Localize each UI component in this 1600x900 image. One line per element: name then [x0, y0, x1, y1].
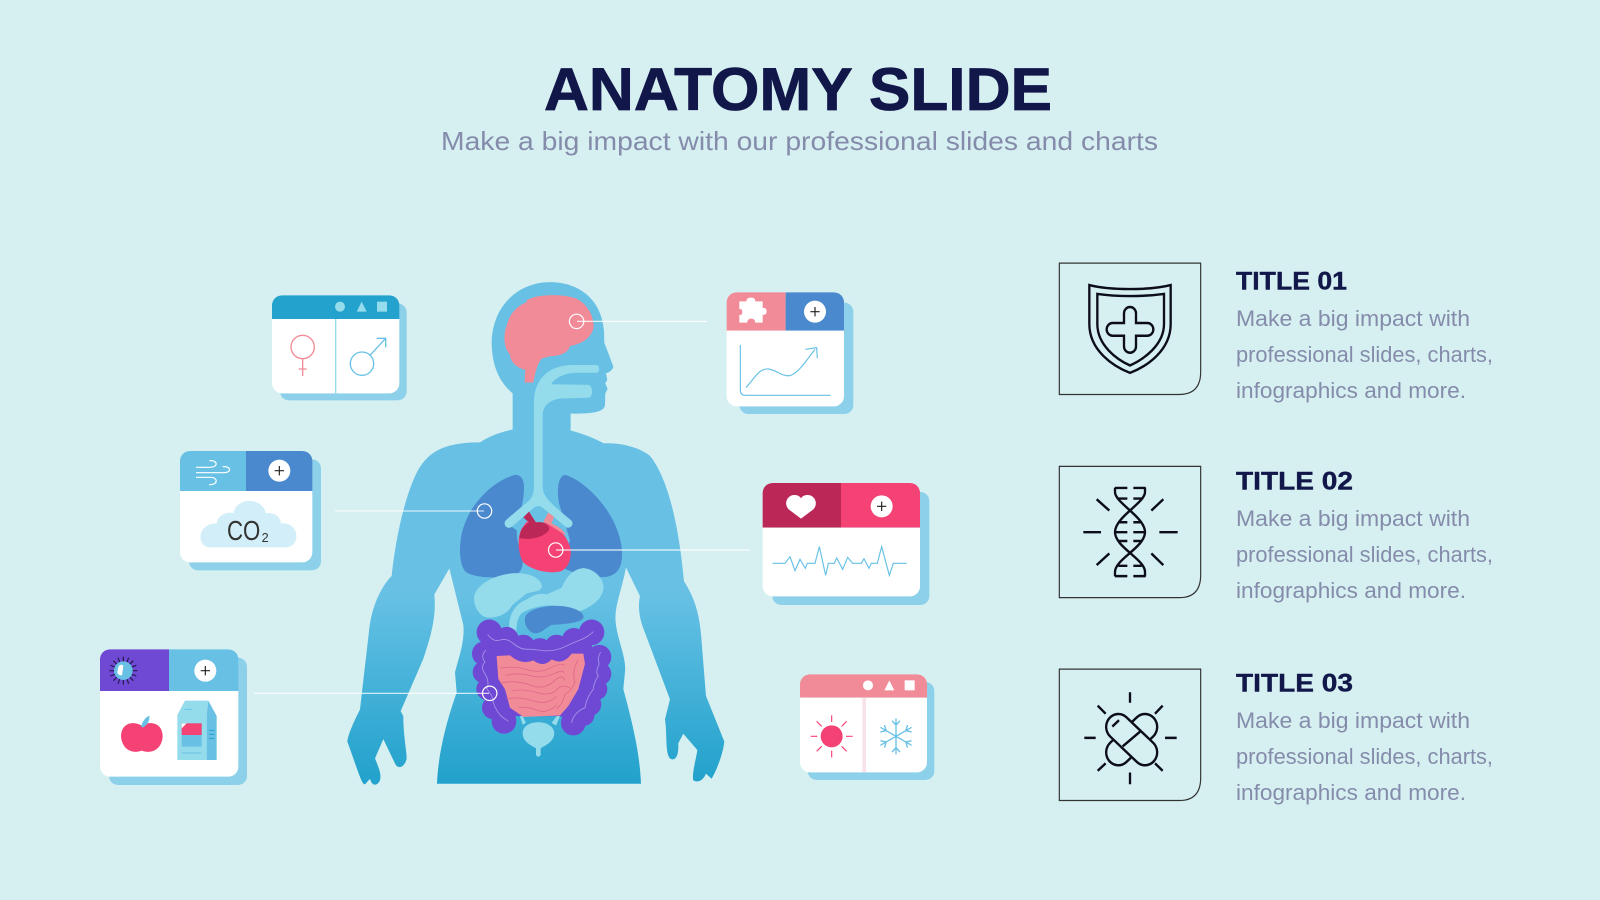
text block: title 03: infographics and more.	[1236, 780, 1466, 805]
icon: male symbol	[350, 338, 386, 375]
line chart	[740, 345, 831, 395]
icon: shield with cross	[1089, 285, 1171, 373]
icon: crossed bandage	[1084, 692, 1177, 784]
icon: female symbol	[291, 335, 314, 376]
lungs	[460, 475, 622, 577]
icon: wind	[196, 461, 230, 485]
leader line: intestine	[254, 686, 497, 700]
header shape icons	[863, 680, 915, 690]
text block: title 02: infographics and more.	[1236, 578, 1466, 603]
label: CO2: CO	[227, 515, 260, 546]
right column icons	[1059, 263, 1201, 801]
icon: plus button	[268, 460, 290, 482]
text block: title 02	[1236, 468, 1493, 603]
label: subscript 2: 2	[262, 531, 269, 545]
icon: plus button	[194, 660, 216, 682]
human body figure	[347, 282, 724, 785]
airway	[505, 365, 599, 528]
ECG trace	[773, 547, 907, 575]
subtitle: Make a big impact with our professional slides and charts	[441, 126, 1158, 156]
left cards	[100, 295, 407, 785]
leader line: heart	[548, 543, 750, 557]
icon: sun	[811, 715, 853, 757]
icon: snowflake	[878, 718, 914, 754]
brain	[504, 295, 594, 383]
panel: shield icon box	[1059, 263, 1201, 394]
icon: cloud	[200, 501, 296, 547]
icon: apple	[121, 716, 163, 752]
text block: title 02: professional slides, charts,	[1236, 542, 1493, 567]
text block: title 03: professional slides, charts,	[1236, 744, 1493, 769]
liver and stomach	[474, 568, 604, 635]
icon: puzzle piece	[739, 298, 767, 323]
icon: germ	[109, 657, 137, 685]
panel: bandage icon box	[1059, 669, 1201, 801]
icon: heart	[786, 495, 816, 519]
text block: title 02: Make a big impact with	[1236, 506, 1470, 531]
card: brain puzzle chart	[727, 292, 853, 414]
card: carbon dioxide	[180, 451, 321, 570]
card: nutrition	[100, 649, 247, 785]
icon: milk carton	[177, 701, 217, 760]
intestine fold lines	[482, 632, 601, 723]
pancreas	[525, 606, 584, 633]
body silhouette	[347, 282, 724, 785]
small intestine	[497, 654, 585, 717]
card: heart rate	[763, 483, 929, 605]
header shape icons	[335, 302, 387, 312]
text block: title 01: TITLE 01	[1236, 268, 1347, 296]
leader line: lungs	[335, 504, 492, 518]
text block: title 01: infographics and more.	[1236, 378, 1466, 403]
panel: DNA icon box	[1059, 466, 1201, 598]
text block: title 01: Make a big impact with	[1236, 306, 1470, 331]
text block: title 03: TITLE 03	[1236, 670, 1353, 698]
card: temperature	[800, 674, 934, 780]
icon: DNA helix	[1083, 488, 1178, 576]
icon: plus button	[871, 495, 893, 517]
text block: title 03	[1236, 670, 1493, 805]
text block: title 01	[1236, 268, 1493, 403]
text block: title 02: TITLE 02	[1236, 468, 1353, 496]
heart	[519, 512, 571, 572]
leader line: brain	[569, 314, 707, 329]
right cards	[727, 292, 934, 780]
text block: title 01: professional slides, charts,	[1236, 342, 1493, 367]
title: ANATOMY SLIDE	[544, 56, 1052, 123]
text block: title 03: Make a big impact with	[1236, 708, 1470, 733]
icon: plus button	[804, 301, 826, 323]
large intestine	[472, 619, 611, 735]
bladder	[520, 716, 560, 757]
card: gender	[272, 295, 407, 400]
